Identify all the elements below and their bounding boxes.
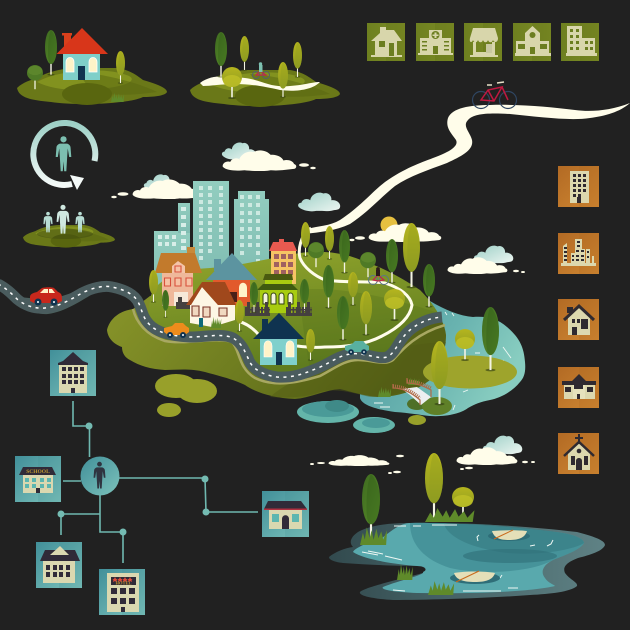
teal car bbox=[345, 341, 369, 355]
cloud teal centre bbox=[298, 193, 340, 211]
icon: apartment green bbox=[561, 23, 599, 61]
icon: church orange bbox=[558, 433, 599, 474]
pond green left bbox=[155, 374, 426, 425]
river islands and trees bbox=[378, 307, 517, 415]
boats bbox=[450, 530, 530, 584]
main hill island bbox=[107, 252, 446, 399]
lake dark shore bbox=[329, 523, 605, 600]
trees front-left bbox=[149, 270, 158, 303]
top island with bike path bbox=[190, 32, 340, 107]
house: lime green bbox=[257, 274, 298, 313]
orange car bbox=[164, 323, 189, 338]
house: tan with orange roof bbox=[155, 247, 202, 306]
icon: tower orange bbox=[558, 166, 599, 207]
lake bbox=[329, 523, 605, 600]
cream winding path bbox=[305, 103, 630, 234]
top row green building icons bbox=[367, 23, 599, 61]
cyclist on hill bbox=[368, 267, 388, 284]
icon: house green bbox=[367, 23, 405, 61]
icon: hotel teal: HOTEL bbox=[115, 580, 132, 586]
small cyclist bbox=[252, 62, 270, 78]
fence bbox=[176, 297, 312, 316]
houses behind bbox=[149, 239, 312, 328]
icon: school teal: SCHOOL bbox=[26, 469, 50, 475]
bridge bbox=[393, 378, 431, 405]
hill with grass bbox=[148, 252, 440, 374]
hill trees bbox=[300, 222, 435, 341]
icon: house teal bbox=[36, 542, 82, 588]
person with circular arrow bbox=[33, 123, 95, 190]
icon: hospital green bbox=[416, 23, 454, 61]
icon: person circle bbox=[80, 456, 120, 496]
icon: house orange bbox=[558, 299, 599, 340]
cloud group right bbox=[448, 246, 525, 274]
hill cream path loop bbox=[238, 228, 412, 347]
road: edge glow bbox=[133, 309, 445, 383]
cloud group with sun bbox=[350, 216, 441, 242]
city skyline towers bbox=[154, 181, 269, 301]
icon: school orange bbox=[558, 367, 599, 408]
boat upper bbox=[488, 530, 530, 541]
left network: central person and connectors bbox=[58, 401, 258, 563]
lake trees and grass bbox=[360, 453, 474, 595]
clouds above city bbox=[111, 143, 525, 274]
icon: school teal bbox=[15, 456, 61, 502]
icon: hotel teal bbox=[99, 569, 145, 615]
island with group of people bbox=[23, 205, 115, 248]
cloud group left bbox=[111, 174, 204, 199]
river on right bbox=[360, 301, 525, 416]
blue ponds bbox=[297, 400, 395, 433]
icon: city orange bbox=[558, 233, 599, 274]
river highlights bbox=[374, 312, 511, 410]
icon: apartment teal bbox=[50, 350, 96, 396]
top left island with house bbox=[17, 28, 167, 105]
blue roof front house bbox=[253, 313, 304, 365]
cloud group top bbox=[222, 143, 316, 171]
icon: school green bbox=[513, 23, 551, 61]
house: red with blue roof bbox=[206, 253, 257, 306]
road bbox=[0, 284, 442, 377]
right column orange icons bbox=[558, 166, 599, 474]
lake clouds bbox=[310, 436, 535, 474]
red car bbox=[30, 287, 62, 306]
white house bbox=[186, 282, 236, 328]
bicycle on path bbox=[472, 82, 516, 108]
lake water bbox=[353, 523, 584, 593]
icon: shop teal bbox=[262, 491, 309, 537]
road: left lip bbox=[8, 285, 96, 314]
boat lower bbox=[450, 571, 500, 584]
icon: shop green bbox=[464, 23, 502, 61]
road dashes bbox=[0, 284, 442, 377]
house: yellow tall bbox=[269, 239, 297, 284]
island lower land bbox=[107, 280, 446, 399]
